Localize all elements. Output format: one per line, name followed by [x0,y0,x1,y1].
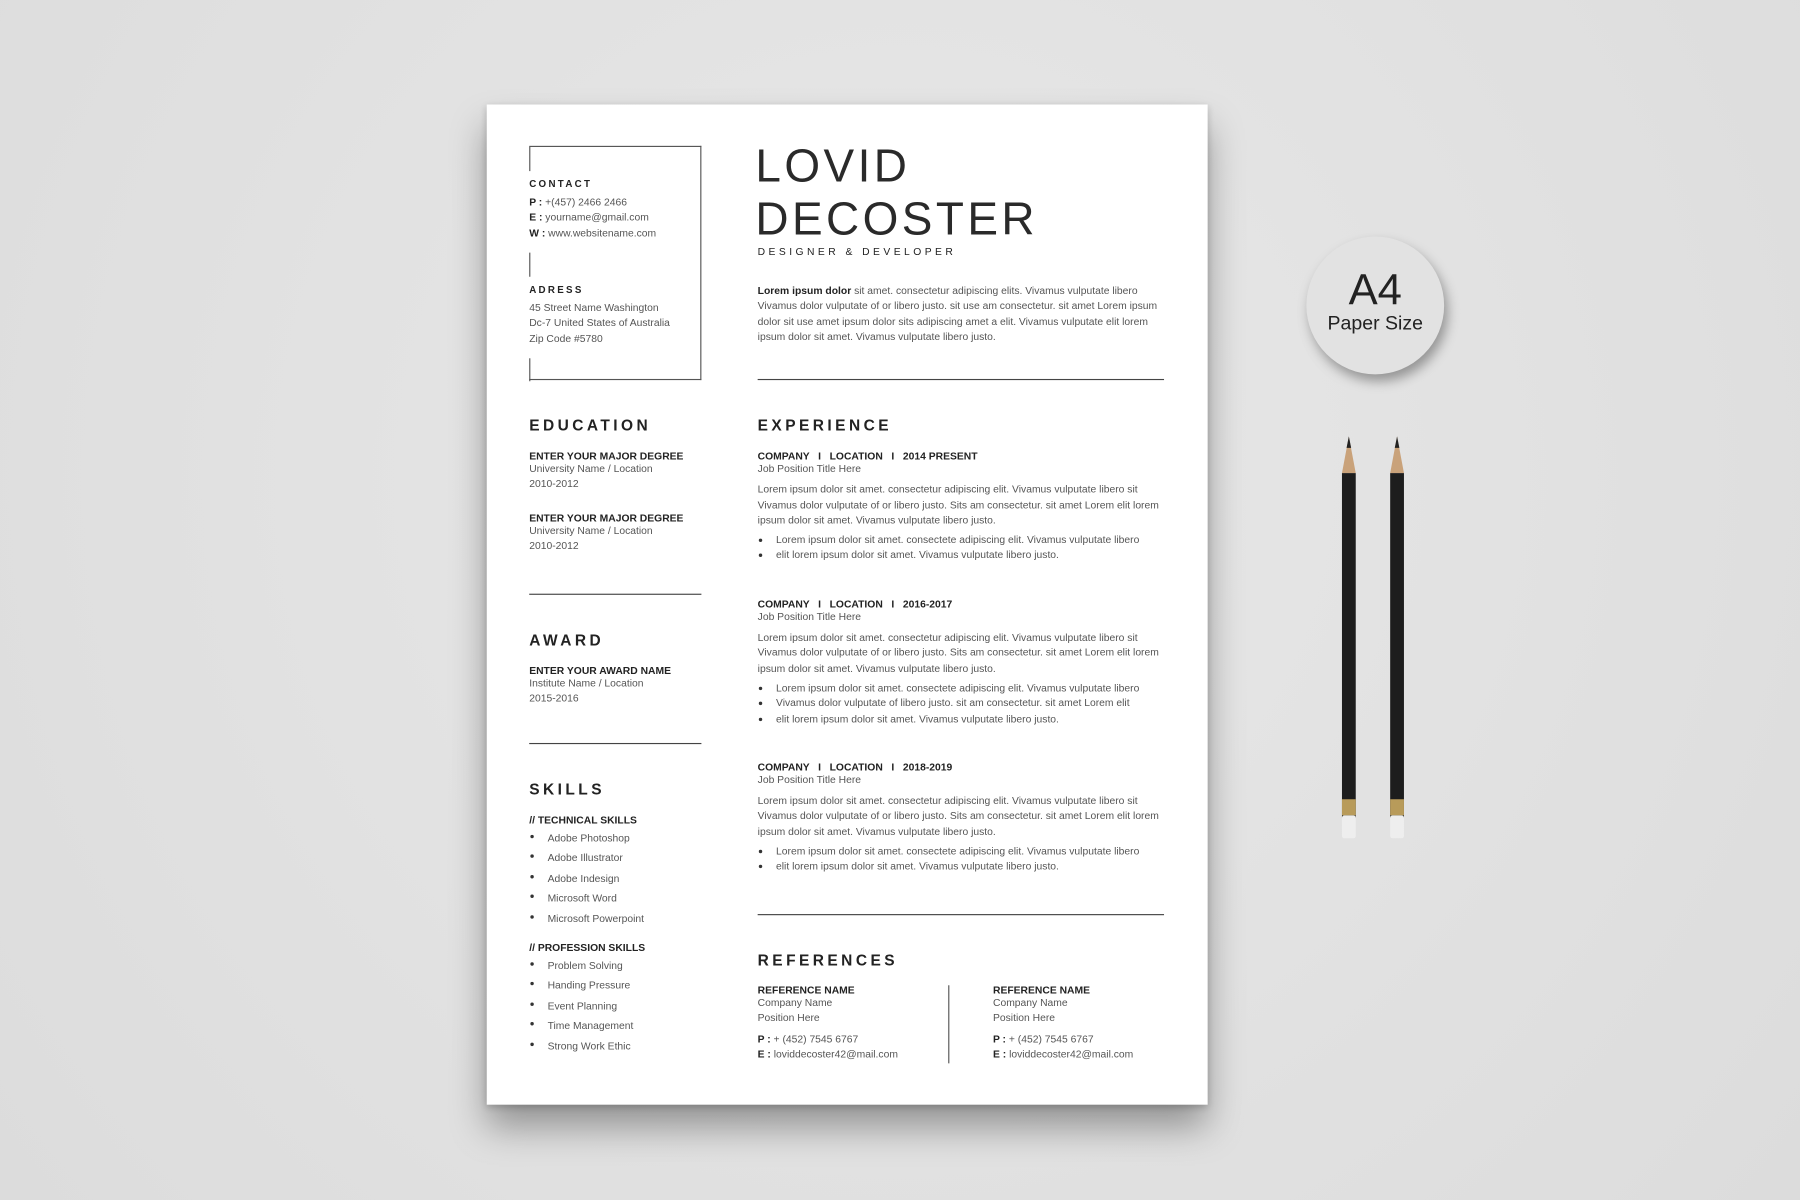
reference 1: E : loviddecoster42@mail.com [758,1048,898,1060]
name title: LOVID [755,141,910,192]
contact text: E : yourname@gmail.com [529,212,649,223]
education: 2010-2012 [529,478,579,490]
name title [755,141,1038,245]
reference 2: E : loviddecoster42@mail.com [993,1048,1133,1060]
skills: SKILLS [529,781,605,798]
resume paper [487,104,1208,1105]
experience: COMPANY I LOCATION I 2014 PRESENT [758,450,978,462]
skills: // PROFESSION SKILLS [529,942,645,953]
skills: Strong Work Ethic [548,1040,631,1051]
contact text: CONTACT [529,178,592,189]
reference 1: Position Here [758,1012,820,1024]
experience: elit lorem ipsum dolor sit amet. Vivamus vulputate libero justo. [776,549,1059,561]
skills: Adobe Indesign [548,873,619,884]
experience: Job Position Title Here [758,463,861,474]
skills: Microsoft Powerpoint [548,912,644,924]
name title: DECOSTER [755,194,1038,245]
icon: pencils [1342,436,1404,838]
reference 2: Position Here [993,1012,1055,1024]
award: 2015-2016 [529,693,579,704]
reference 1: P : + (452) 7545 6767 [758,1033,858,1045]
experience: Lorem ipsum dolor sit amet. consectetur adipiscing elit. Vivamus vulputate libero sit Vivamus dolor vulputate of or libero justo. Sits am consectetur. sit amet Lorem elit lorem ipsum dolor sit amet. Vivamus vulputate libero justo. [758,484,1159,526]
badge: A4 paper size: Paper Size [1328,312,1423,334]
skills: Event Planning [548,1000,617,1011]
address text: Zip Code #5780 [529,333,603,344]
reference 1: Company Name [758,997,832,1008]
reference 1 [758,984,898,1060]
contact text: W : www.websitename.com [529,227,656,238]
skills: Microsoft Word [548,893,617,904]
education: University Name / Location [529,524,653,536]
award: ENTER YOUR AWARD NAME [529,665,671,676]
reference 2 [993,984,1133,1060]
experience: Lorem ipsum dolor sit amet. consectete adipiscing elit. Vivamus vulputate libero [776,845,1139,857]
experience: Lorem ipsum dolor sit amet. consectete adipiscing elit. Vivamus vulputate libero [776,534,1139,546]
skills: Adobe Photoshop [548,833,630,844]
references heading: REFERENCES [758,952,898,969]
education: University Name / Location [529,463,653,474]
experience: Job Position Title Here [758,774,861,785]
contact box [529,146,701,380]
education: ENTER YOUR MAJOR DEGREE [529,450,683,462]
skills: Adobe Illustrator [548,853,623,864]
reference 2: P : + (452) 7545 6767 [993,1033,1094,1045]
award: AWARD [529,632,604,649]
experience: Lorem ipsum dolor sit amet. consectetur adipiscing elit. Vivamus vulputate libero sit Vivamus dolor vulputate of or libero justo. Sits am consectetur. sit amet Lorem elit lorem ipsum dolor sit amet. Vivamus vulputate libero justo. [758,632,1159,674]
experience: COMPANY I LOCATION I 2016-2017 [758,598,952,610]
experience: Job Position Title Here [758,611,861,622]
experience [758,417,1159,872]
skills: Handing Pressure [548,980,630,992]
skills: Problem Solving [548,960,623,972]
award: Institute Name / Location [529,678,644,689]
education [529,417,683,551]
reference 2: REFERENCE NAME [993,984,1090,996]
experience: elit lorem ipsum dolor sit amet. Vivamus vulputate libero justo. [776,860,1059,872]
skills: Time Management [548,1020,633,1031]
address text: 45 Street Name Washington [529,302,659,313]
experience: COMPANY I LOCATION I 2018-2019 [758,761,952,773]
address text: Dc-7 United States of Australia [529,317,670,329]
intro text: Lorem ipsum dolor sit amet. consectetur adipiscing elits. Vivamus vulputate libero Vivamus dolor vulputate of or libero justo. sit use am consectetur. sit amet Lorem ipsum dolor sit use amet ipsum dolor sits adipiscing amet a elit. Vivamus vulputate elit lorem ipsum dolor sit amet. Vivamus vulputate libero justo. [758,285,1157,342]
badge: A4 paper size [1306,237,1444,374]
subtitle: DESIGNER & DEVELOPER [758,246,956,257]
skills: // TECHNICAL SKILLS [529,814,637,826]
experience: Lorem ipsum dolor sit amet. consectetur adipiscing elit. Vivamus vulputate libero sit Vivamus dolor vulputate of or libero justo. Sits am consectetur. sit amet Lorem elit lorem ipsum dolor sit amet. Vivamus vulputate libero justo. [758,795,1159,837]
reference 2: Company Name [993,997,1068,1008]
address text [529,284,670,344]
reference 1: REFERENCE NAME [758,984,855,996]
experience: Vivamus dolor vulputate of libero justo. sit am consectetur. sit amet Lorem elit [776,697,1130,709]
address text: ADRESS [529,284,584,295]
education: 2010-2012 [529,540,579,551]
award [529,632,671,704]
contact text: P : +(457) 2466 2466 [529,196,627,208]
experience: EXPERIENCE [758,417,892,434]
badge: A4 paper size: A4 [1349,266,1402,315]
experience: Lorem ipsum dolor sit amet. consectete adipiscing elit. Vivamus vulputate libero [776,682,1139,694]
education: ENTER YOUR MAJOR DEGREE [529,512,683,523]
experience: elit lorem ipsum dolor sit amet. Vivamus vulputate libero justo. [776,713,1059,724]
education: EDUCATION [529,417,651,434]
skills [529,781,645,1052]
contact text [529,178,656,238]
